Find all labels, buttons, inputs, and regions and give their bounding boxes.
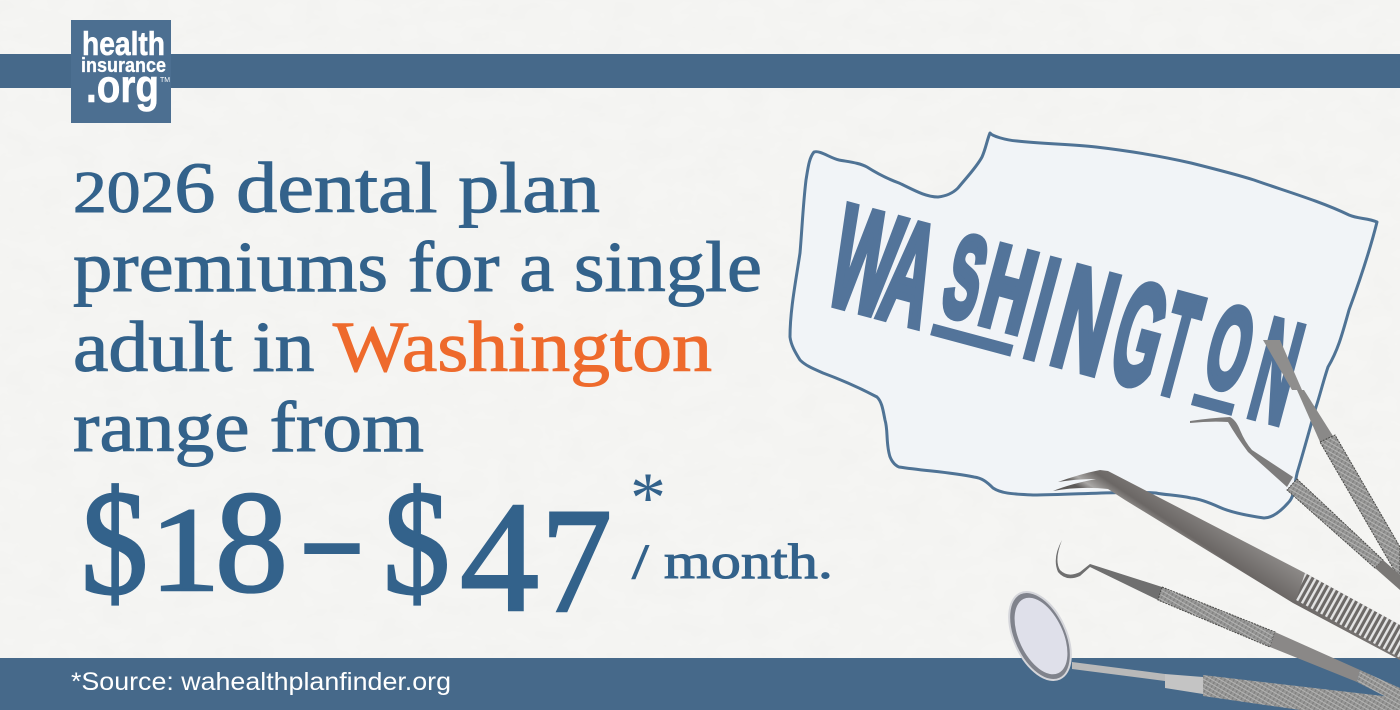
price range: – <box>307 485 357 592</box>
asterisk: * <box>630 458 666 538</box>
state name lettering: H <box>970 220 1048 358</box>
price range: 4 <box>460 470 539 645</box>
headline: premiums for a single <box>73 227 762 307</box>
price range: 7 <box>541 478 612 644</box>
per month label: / month. <box>632 533 833 589</box>
state name lettering: I <box>1013 229 1071 389</box>
price range: 8 <box>215 461 288 623</box>
price range: $ <box>81 460 148 626</box>
dental tools <box>997 340 1400 710</box>
Washington state map <box>790 133 1377 518</box>
tool: mirror <box>997 582 1400 710</box>
state name lettering <box>814 175 1316 454</box>
logo: healthinsurance.org <box>71 20 171 123</box>
price range: $ <box>383 460 450 626</box>
logo: healthinsurance.org: TM <box>160 77 170 84</box>
state name lettering: N <box>1039 236 1132 405</box>
logo: healthinsurance.org: health <box>82 25 165 62</box>
tool: tweezers <box>1053 470 1400 660</box>
state name lettering: N <box>1237 289 1316 454</box>
state name lettering: A <box>867 190 954 357</box>
state name lettering: O <box>1194 280 1266 416</box>
state name lettering: G <box>1097 251 1182 418</box>
state outline <box>790 133 1377 518</box>
top band <box>0 54 1400 88</box>
price range: 1 <box>150 483 220 616</box>
headline <box>73 148 762 467</box>
bottom band <box>0 658 1400 710</box>
tool: probe <box>1056 540 1400 704</box>
headline: 2026 dental plan <box>73 148 600 228</box>
source footnote: *Source: wahealthplanfinder.org <box>71 668 451 696</box>
logo: healthinsurance.org: insurance <box>81 55 166 77</box>
state name lettering: W <box>814 175 916 347</box>
tool: spatula <box>1263 340 1400 580</box>
state name lettering: S <box>932 210 999 344</box>
logo: healthinsurance.org: .org <box>86 60 159 112</box>
tool: explorer <box>1190 417 1400 590</box>
state name lettering: T <box>1144 264 1214 427</box>
headline: adult in Washington <box>73 307 712 387</box>
headline: range from <box>73 387 424 467</box>
